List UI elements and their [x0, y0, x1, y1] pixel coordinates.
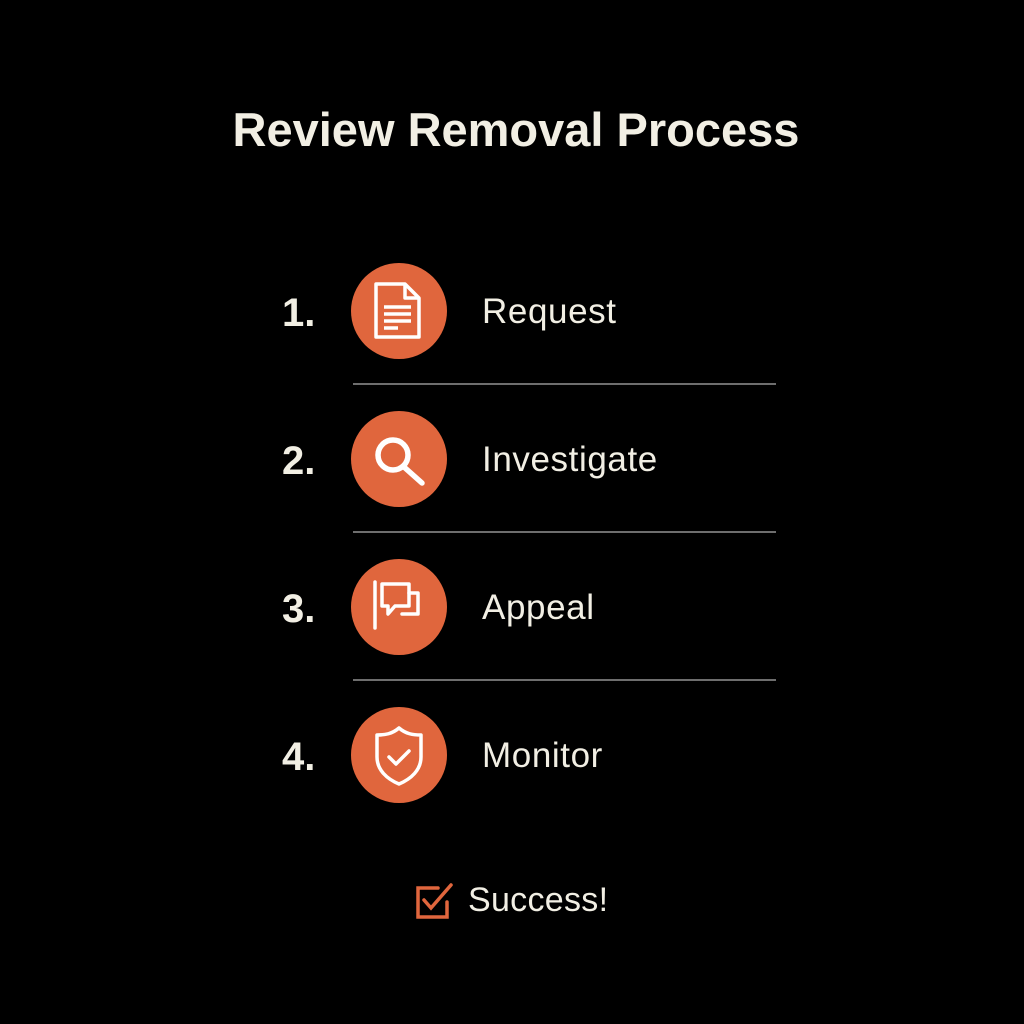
- success callout: [416, 881, 608, 919]
- icon: document: [351, 263, 447, 359]
- success text: Success!: [468, 881, 608, 919]
- step 3 number: 3.: [282, 587, 315, 631]
- step 2 label: Investigate: [482, 440, 658, 479]
- icon: shield check: [351, 707, 447, 803]
- icon: checkbox: [416, 883, 453, 919]
- step 4 number: 4.: [282, 735, 315, 779]
- icon: magnifier: [351, 411, 447, 507]
- step 4 label: Monitor: [482, 736, 603, 775]
- step 1 label: Request: [482, 292, 617, 331]
- icon: chat flag: [351, 559, 447, 655]
- title: Review Removal Process: [233, 103, 799, 156]
- step 2 number: 2.: [282, 439, 315, 483]
- step 3 label: Appeal: [482, 588, 595, 627]
- step 1 number: 1.: [282, 291, 315, 335]
